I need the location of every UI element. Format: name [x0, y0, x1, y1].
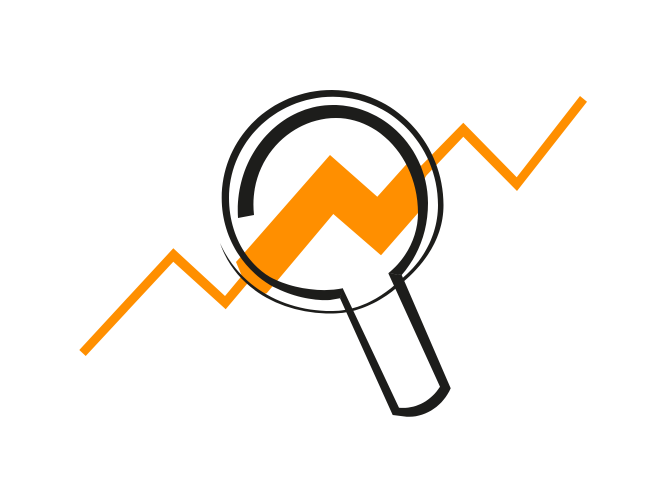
orange trend line — [79, 96, 587, 356]
magnifying glass handle — [340, 273, 451, 417]
lens highlight arc — [238, 105, 428, 275]
magnified trend line — [236, 155, 428, 294]
magnifying glass lens ring — [220, 90, 444, 314]
